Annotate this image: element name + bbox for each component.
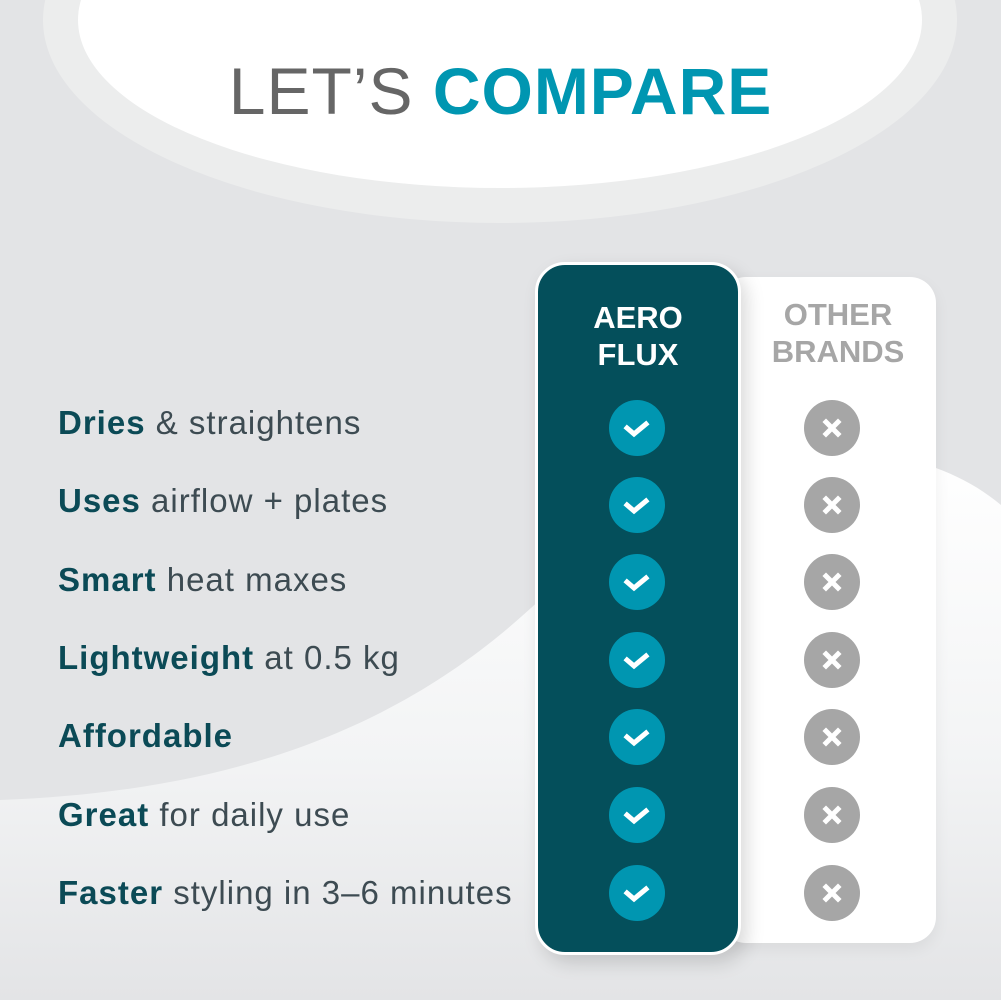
title: LET’S COMPARE bbox=[229, 54, 772, 128]
row labels: Faster styling in 3–6 minutes bbox=[58, 874, 513, 911]
icons: checks bbox=[609, 400, 665, 921]
row labels: Great for daily use bbox=[58, 796, 350, 833]
heading: aero flux: FLUX bbox=[598, 337, 678, 372]
row labels: Uses airflow + plates bbox=[58, 482, 388, 519]
icons: crosses bbox=[804, 400, 860, 921]
panel: aero flux bbox=[535, 262, 741, 955]
heading: other brands bbox=[772, 297, 904, 369]
row labels: Dries & straightens bbox=[58, 404, 361, 441]
heading: aero flux: AERO bbox=[593, 300, 683, 335]
heading: other brands: OTHER bbox=[784, 297, 892, 332]
row labels: Affordable bbox=[58, 717, 233, 754]
panel: other brands bbox=[720, 277, 936, 943]
row labels: Lightweight at 0.5 kg bbox=[58, 639, 400, 676]
row labels bbox=[58, 404, 513, 911]
heading: aero flux bbox=[593, 300, 683, 372]
row labels: Smart heat maxes bbox=[58, 561, 347, 598]
heading: other brands: BRANDS bbox=[772, 334, 904, 369]
